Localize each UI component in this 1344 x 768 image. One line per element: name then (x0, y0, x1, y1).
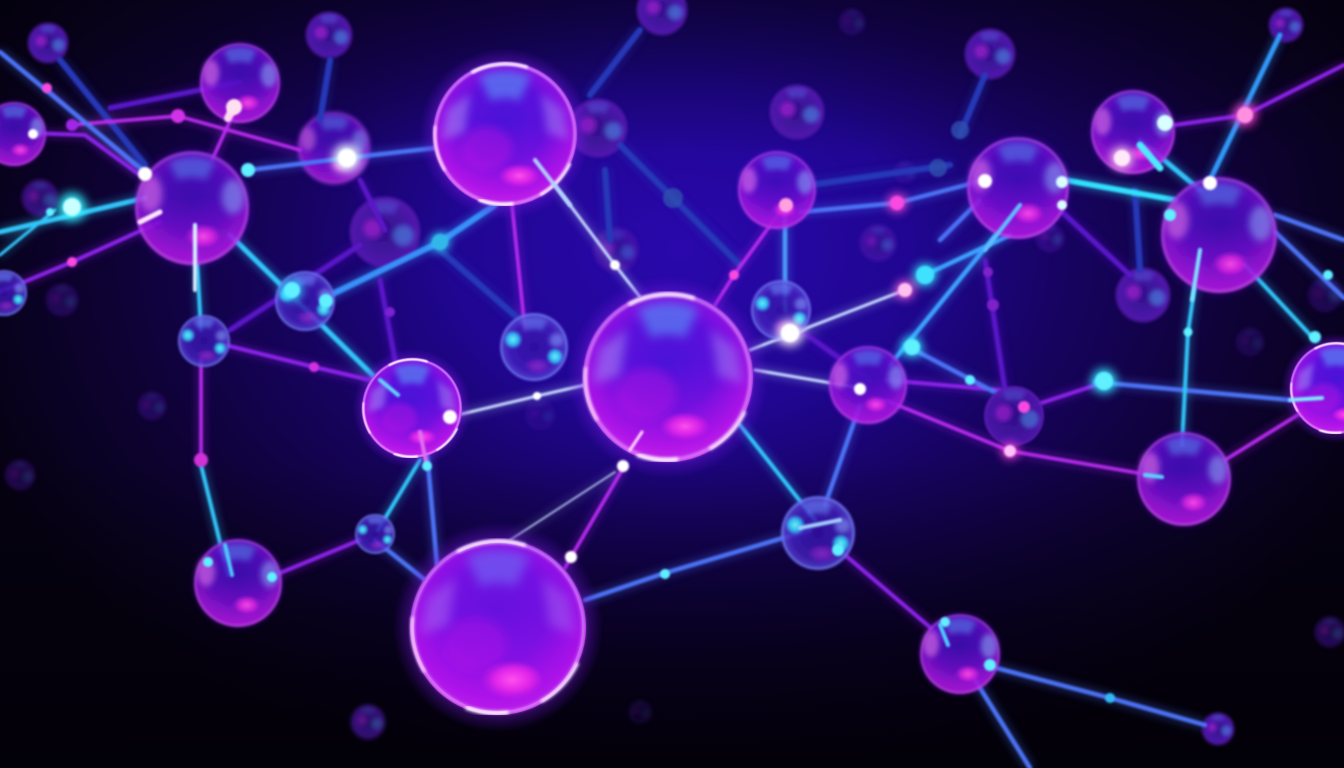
sphere: small lower left (353, 512, 397, 556)
sphere: bottom right small (1202, 713, 1234, 745)
sphere: lower right (1130, 425, 1238, 533)
sphere: upper center right (733, 146, 821, 234)
sphere: central large (566, 275, 770, 479)
sphere: behind top large (569, 99, 627, 157)
sphere: left main (127, 143, 257, 273)
connection nodes glow (58, 104, 1256, 459)
sphere: lower left (188, 533, 288, 633)
sphere: right edge (1281, 333, 1344, 443)
sphere: upper center left small (306, 12, 352, 58)
sphere: upper left pink (194, 37, 286, 129)
sphere: upper right (960, 130, 1076, 246)
nodes: cyan (46, 163, 1333, 703)
sphere: far left middle (175, 312, 233, 370)
sphere: center left (352, 348, 472, 468)
sphere: far top right (1269, 8, 1303, 42)
nodes: dim blue (663, 121, 969, 208)
sphere: top right small (965, 29, 1015, 79)
sphere: left of center (497, 310, 571, 384)
sphere: bottom large (392, 521, 604, 733)
sphere: top center small (637, 0, 687, 35)
sphere: left middle (272, 268, 338, 334)
sphere: right main (1153, 169, 1285, 301)
sphere: top mid right (770, 85, 824, 139)
connection nodes (28, 83, 1333, 703)
sphere: bottom right (914, 608, 1006, 700)
nodes: magenta (42, 83, 1253, 467)
sphere: top large (419, 48, 591, 220)
sphere: right back (1116, 268, 1170, 322)
sphere: right middle small (984, 386, 1044, 446)
sphere: center left back (350, 197, 420, 267)
sphere: top right (1085, 84, 1181, 180)
sphere: left upper mid (293, 107, 375, 189)
sphere: below center right (777, 492, 859, 574)
nodes: white (28, 99, 1217, 563)
sphere: right of center (824, 341, 912, 429)
line tips over spheres (140, 105, 1322, 645)
sphere: near center top right (748, 277, 814, 343)
sphere: upper left small (28, 23, 68, 63)
sphere: left edge lower (0, 268, 29, 318)
sphere: left edge top (0, 98, 50, 170)
foreground large spheres (352, 48, 1344, 733)
